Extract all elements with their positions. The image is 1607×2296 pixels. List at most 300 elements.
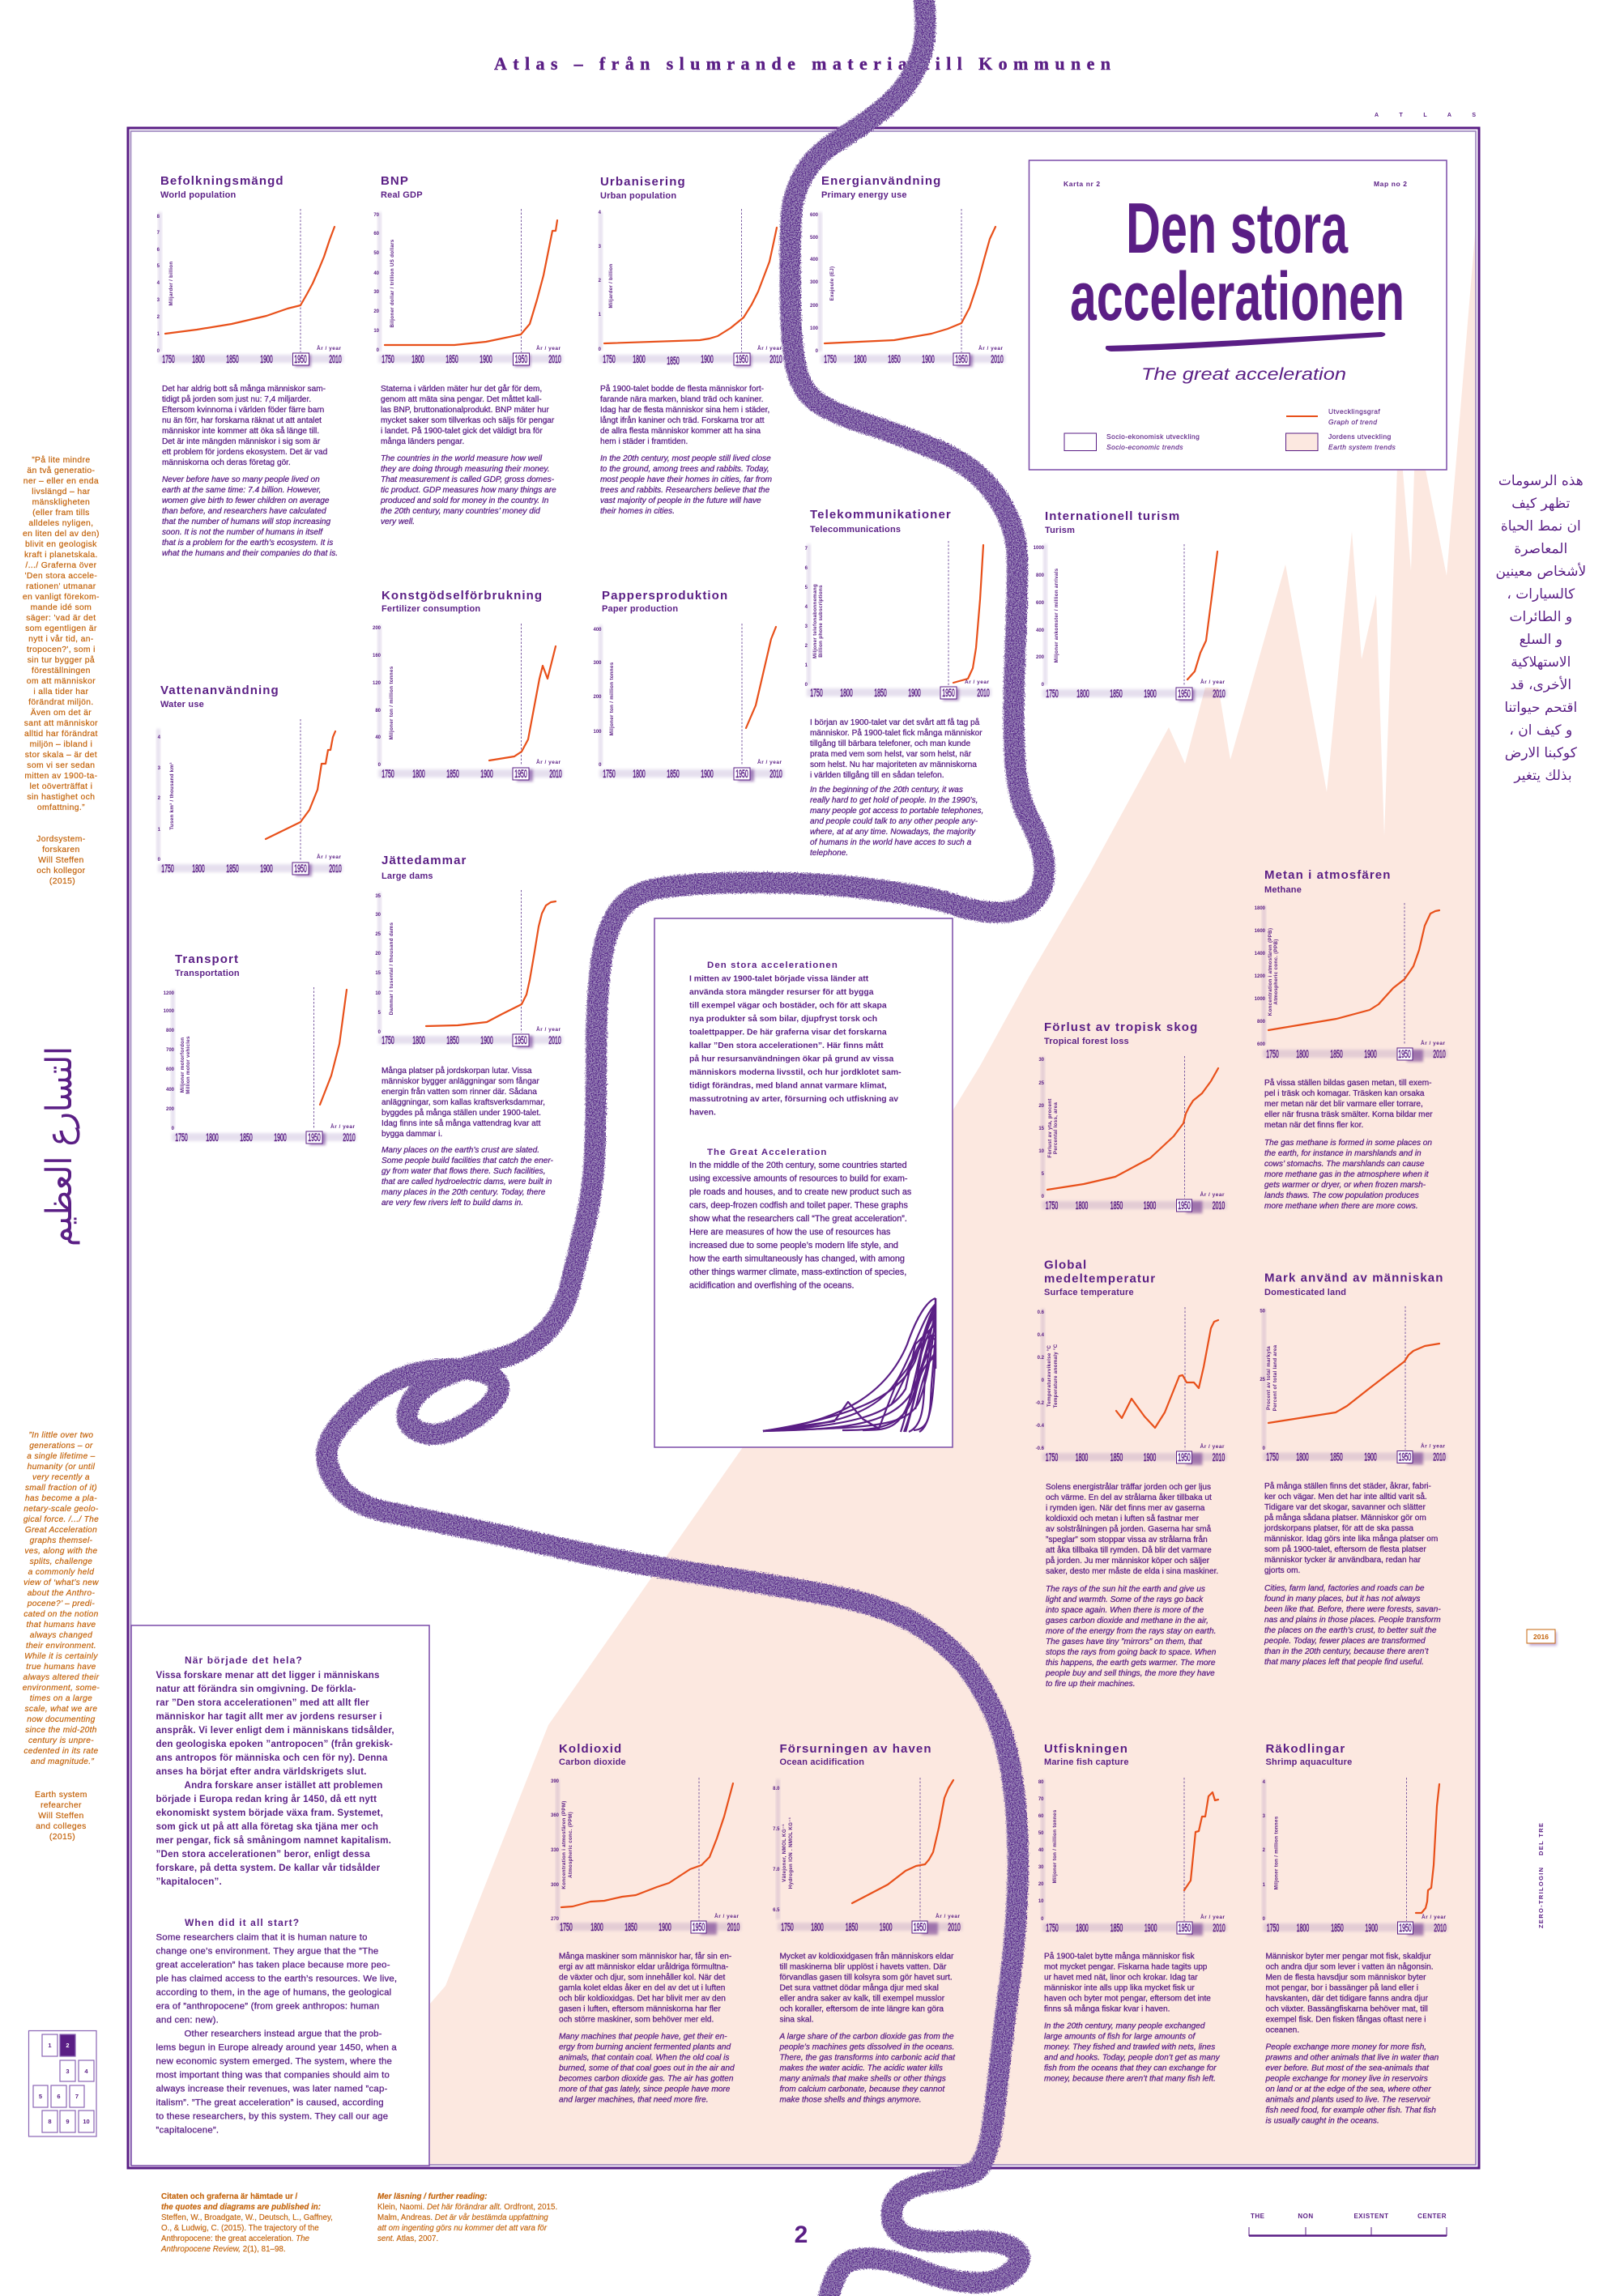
chart: Vattenanvändning: 0 bbox=[158, 858, 161, 863]
panel: När började det hela: new economic system emerged. The system, where the bbox=[156, 2057, 392, 2067]
text: Global medeltemperatur: koldioxid och metan i luften så fastnar mer bbox=[1046, 1514, 1200, 1523]
quote english: ves, along with the bbox=[24, 1547, 97, 1556]
panel: När började det hela: ”kapitalocen”. bbox=[156, 1876, 222, 1887]
chart: Vattenanvändning bbox=[156, 684, 343, 876]
quote english: their environment. bbox=[26, 1642, 96, 1651]
quote english: very recently a bbox=[32, 1473, 90, 1482]
text: Räkodlingar: ever before. But most of the sea-animals that bbox=[1265, 2064, 1430, 2073]
panel: När började det hela: människor har tagit allt mer av jordens resurser i bbox=[156, 1711, 382, 1722]
chart: Telekommunikationer: 3 bbox=[805, 624, 808, 629]
legend: Socio-economic trends bbox=[1106, 443, 1183, 451]
chart: BNP: 70 bbox=[373, 213, 380, 218]
chart: Utfiskningen: 40 bbox=[1038, 1848, 1044, 1853]
chart: Försurningen av haven: 7.0 bbox=[773, 1868, 780, 1872]
chart: Koldioxid: 1950 bbox=[693, 1922, 705, 1934]
chart: Räkodlingar: 1 bbox=[1263, 1883, 1266, 1888]
text: Räkodlingar: och andra djur som lever i vatten än någonsin. bbox=[1265, 1962, 1434, 1972]
quote english: graphs themsel- bbox=[30, 1536, 93, 1545]
quote attribution english: and colleges bbox=[36, 1822, 87, 1831]
chart: Jättedammar: Large dams bbox=[382, 871, 433, 881]
chart: Telekommunikationer: 2010 bbox=[977, 688, 990, 700]
chart: Förlust av tropisk skog: 1750 bbox=[1046, 1200, 1058, 1212]
chart: Vattenanvändning: 1950 bbox=[294, 863, 307, 875]
chart: Global medeltemperatur: Surface temperature bbox=[1044, 1288, 1134, 1297]
map navigator: 5 bbox=[39, 2093, 42, 2100]
text: Befolkningsmängd: what the humans and their companies do that is. bbox=[162, 549, 338, 558]
chart: Global medeltemperatur: 1800 bbox=[1076, 1452, 1088, 1464]
quote english: While it is certainly bbox=[24, 1652, 98, 1661]
text: Försurningen: Mycket av koldioxidgasen från människors eldar bbox=[779, 1952, 954, 1962]
chart: BNP: 1850 bbox=[445, 354, 458, 366]
chart: Vattenanvändning: Tusen km³ / thousand km³ bbox=[169, 762, 175, 830]
brush underline bbox=[1106, 332, 1385, 351]
chart: Urbanisering: 3 bbox=[599, 245, 602, 249]
text: Mark använd: people. Today, fewer places are transformed bbox=[1264, 1637, 1426, 1646]
chart: BNP: 40 bbox=[373, 271, 380, 276]
chart: Metan i atmosfären: Atmospheric conc. (PPB) bbox=[1273, 939, 1279, 1005]
chart: Energianvändning: Primary energy use bbox=[821, 190, 907, 200]
text: Försurningen: people’s machines gets dissolved in the oceans. bbox=[779, 2043, 954, 2052]
text: Mark använd: Tidigare var det skogar, savanner och slätter bbox=[1264, 1503, 1426, 1512]
chart: Befolkningsmängd: 4 bbox=[157, 281, 160, 286]
chart: Telekommunikationer: 1950 bbox=[942, 688, 955, 700]
text: BNP: Staterna i världen mäter hur det går för dem, bbox=[381, 384, 542, 394]
text: Koldioxid: animals, that contain coal. When the old coal is bbox=[559, 2054, 729, 2063]
text: Metan: mer metan när det blir varmare eller torrare, bbox=[1264, 1100, 1423, 1109]
text: Befolkningsmängd: Never before have so many people lived on bbox=[162, 475, 320, 484]
chart: Konstgödselförbrukning: Fertilizer consumption bbox=[382, 604, 480, 614]
chart: Urbanisering bbox=[599, 175, 784, 368]
map navigator bbox=[29, 2031, 96, 2136]
chart: Vattenanvändning: 1900 bbox=[260, 863, 273, 875]
panel: Den stora accelerationen: ple roads and houses, and to create new product such as bbox=[689, 1187, 912, 1197]
quote swedish: omfattning.” bbox=[37, 803, 85, 812]
text: Global medeltemperatur: The rays of the sun hit the earth and give us bbox=[1046, 1585, 1205, 1594]
chart: Försurningen av haven: Hydrogen ION . NMOL KG⁻¹ bbox=[788, 1817, 794, 1889]
chart: Energianvändning: 2010 bbox=[991, 354, 1004, 366]
quote swedish: (2015) bbox=[49, 877, 75, 886]
chart: Vattenanvändning: 2010 bbox=[329, 863, 342, 875]
text: Koldioxid: and larger machines, that need more fire. bbox=[559, 2096, 709, 2105]
text: BNP: genom att mäta sina pengar. Det måttet kall- bbox=[381, 394, 542, 404]
text: Jättedammar: gy from water that flows there. Such facilities, bbox=[382, 1167, 546, 1176]
chart: Koldioxid: Carbon dioxide bbox=[559, 1757, 626, 1767]
chart: Mark använd av människan: 1800 bbox=[1296, 1451, 1309, 1463]
chart: Befolkningsmängd: 8 bbox=[157, 215, 160, 219]
text: Koldioxid: gasen i luften, eftersom människorna har fler bbox=[559, 2005, 721, 2014]
chart: Pappersproduktion: 1750 bbox=[603, 769, 616, 781]
quote swedish: föreställningen bbox=[32, 667, 91, 675]
chart: Energianvändning: 600 bbox=[810, 213, 819, 218]
text: Jättedammar: many places in the 20th century. Today, there bbox=[382, 1188, 546, 1197]
chart: Konstgödselförbrukning: 1950 bbox=[514, 769, 527, 781]
chart: Transport: 200 bbox=[166, 1107, 175, 1112]
chart: Jättedammar: 1800 bbox=[412, 1035, 425, 1047]
quote swedish: mande idé som bbox=[31, 603, 92, 612]
quote swedish: en vanligt förekom- bbox=[23, 593, 100, 602]
chart: Internationell turism: 0 bbox=[1042, 683, 1045, 688]
chart: Jättedammar: 15 bbox=[375, 971, 382, 976]
chart: Förlust av tropisk skog bbox=[1038, 1020, 1226, 1213]
quote swedish: ”På lite mindre bbox=[32, 455, 91, 465]
chart: Energianvändning: 1950 bbox=[955, 354, 968, 366]
chart: Koldioxid: 1800 bbox=[590, 1922, 603, 1934]
quote swedish: än två generatio- bbox=[27, 466, 95, 475]
text: Global medeltemperatur: i rymden igen. När det finns mer av gaserna bbox=[1046, 1504, 1205, 1513]
text: Global medeltemperatur bbox=[1045, 1482, 1218, 1689]
panel: När började det hela: according to them, in the age of humans, the geological bbox=[156, 1988, 391, 1998]
footer further reading: Mer läsning / further reading: bbox=[377, 2192, 488, 2201]
chart: Pappersproduktion: 400 bbox=[593, 628, 602, 633]
the non existent center scale: NON bbox=[1298, 2213, 1314, 2220]
chart: Global medeltemperatur: 0 bbox=[1042, 1378, 1045, 1383]
quote english: scale, what we are bbox=[25, 1705, 97, 1714]
text: Utfiskningen: haven och byter mot pengar, eftersom det inte bbox=[1044, 1995, 1211, 2004]
text: Jättedammar: Många platser på jordskorpan lutar. Vissa bbox=[382, 1066, 532, 1076]
text: BNP bbox=[380, 384, 556, 526]
chart: Transport: 1850 bbox=[240, 1132, 253, 1144]
text: Metan: more methane gas in the atmosphere when it bbox=[1264, 1170, 1430, 1179]
text: Befolkningsmängd bbox=[162, 384, 338, 558]
chart: Vattenanvändning: 4 bbox=[158, 735, 161, 740]
panel: map title: Map no 2 bbox=[1374, 180, 1408, 188]
quote swedish: förändrat miljön. bbox=[28, 698, 94, 707]
chart: Koldioxid: År / year bbox=[714, 1912, 740, 1919]
chart: Telekommunikationer: Miljoner telefonabonnemang bbox=[812, 584, 818, 658]
text: BNP: tic product. GDP measures how many things are bbox=[381, 486, 556, 495]
text: Metan: The gas methane is formed in some places on bbox=[1264, 1139, 1432, 1148]
arabic text right column: هذه الرسومات bbox=[1498, 473, 1584, 489]
text: BNP: the 20th century, many countries’ money did bbox=[381, 507, 540, 516]
chart: Försurningen av haven: 1950 bbox=[914, 1922, 926, 1934]
chart: Mark använd av människan: 1900 bbox=[1364, 1451, 1377, 1463]
chart: Utfiskningen: 60 bbox=[1038, 1814, 1044, 1819]
chart: BNP: 10 bbox=[373, 329, 380, 334]
panel: När började det hela: forskare, på detta system. De kallar vår tidsålder bbox=[156, 1863, 381, 1873]
chart: Jättedammar: Jättedammar bbox=[382, 854, 467, 867]
legend bbox=[1064, 407, 1396, 451]
text: Urbanisering: de allra flesta människor kommer att ha sina bbox=[600, 427, 761, 436]
panel: Den stora accelerationen: nya produkter så som bilar, djupfryst torsk och bbox=[689, 1014, 877, 1024]
panel: När började det hela: most important thing was that companies should aim to bbox=[156, 2071, 390, 2081]
panel: Den stora accelerationen: increased due to some people’s modern life style, and bbox=[689, 1241, 898, 1250]
chart: Konstgödselförbrukning: 1800 bbox=[412, 769, 425, 781]
chart: Mark använd av människan: Domesticated land bbox=[1264, 1288, 1346, 1297]
chart: Befolkningsmängd: 7 bbox=[157, 231, 160, 236]
text: Försurningen: förvandlas gasen till kolsyra som gör havet surt. bbox=[779, 1974, 953, 1983]
panel: När började det hela: som gick ut på att alla företag ska tjäna mer och bbox=[156, 1821, 378, 1832]
quote swedish: let oöverträffat i bbox=[30, 782, 92, 791]
legend: Jordens utveckling bbox=[1328, 432, 1392, 441]
chart: BNP: 0 bbox=[377, 348, 380, 353]
text: Global medeltemperatur: och värme. En del av strålarna åker tillbaka ut bbox=[1046, 1493, 1212, 1502]
quote english: a single lifetime – bbox=[27, 1452, 96, 1461]
chart: Koldioxid: 300 bbox=[551, 1883, 560, 1888]
text: Metan: lands thaws. The cow population produces bbox=[1264, 1191, 1419, 1200]
chart: Konstgödselförbrukning: 200 bbox=[373, 626, 382, 631]
text: Utfiskningen: and and hooks. Today, people don’t get as many bbox=[1044, 2054, 1221, 2063]
chart: Mark använd av människan: Mark använd av människan bbox=[1264, 1272, 1443, 1285]
chart: Koldioxid: 270 bbox=[551, 1917, 560, 1922]
the non existent center scale: CENTER bbox=[1417, 2213, 1447, 2220]
chart: Försurningen av haven bbox=[773, 1742, 962, 1935]
footer further reading: Klein, Naomi. Det här förändrar allt. Ordfront, 2015. bbox=[377, 2203, 557, 2212]
chart: Internationell turism: Internationell turism bbox=[1045, 509, 1180, 523]
chart: Jättedammar: 10 bbox=[375, 991, 382, 996]
chart: Utfiskningen: 50 bbox=[1038, 1831, 1044, 1836]
chart: Energianvändning bbox=[810, 174, 1005, 367]
chart: Energianvändning: 0 bbox=[816, 349, 819, 354]
text: Jättedammar: människor bygger anläggningar som fångar bbox=[382, 1076, 539, 1086]
text: Utfiskningen: finns så många fiskar kvar i haven. bbox=[1044, 2004, 1170, 2014]
text: Jättedammar: are very few rivers left to build dams in. bbox=[382, 1199, 523, 1208]
chart: Metan i atmosfären: År / year bbox=[1421, 1039, 1446, 1046]
chart: Urbanisering: 2010 bbox=[769, 354, 782, 366]
panel: När började det hela: började i Europa redan kring år 1450, då ett nytt bbox=[156, 1794, 377, 1804]
text: Räkodlingar: people exchange for money live in reservoirs bbox=[1265, 2075, 1428, 2084]
chart: Koldioxid: 330 bbox=[551, 1848, 560, 1853]
chart: Utfiskningen bbox=[1038, 1742, 1227, 1936]
text: Global medeltemperatur: more of the energy from the rays stay on earth. bbox=[1046, 1627, 1216, 1636]
quote swedish: tropocen?', som i bbox=[27, 645, 96, 654]
text: Urbanisering: most people have their homes in cities, far from bbox=[600, 475, 772, 484]
arabic text right column: المعاصرة bbox=[1514, 541, 1567, 557]
chart: Försurningen av haven: 7.5 bbox=[773, 1827, 780, 1832]
chart: Jättedammar: 35 bbox=[375, 894, 382, 899]
chart: Urbanisering: 1950 bbox=[735, 354, 748, 366]
chart: Förlust av tropisk skog: 1800 bbox=[1076, 1200, 1088, 1212]
text: Försurningen: sina skal. bbox=[779, 2016, 814, 2025]
chart: Urbanisering: 1800 bbox=[633, 354, 646, 366]
panel: När började det hela: ple has claimed access to the earth’s resources. We live, bbox=[156, 1974, 397, 1984]
chart: Telekommunikationer: År / year bbox=[965, 678, 990, 685]
text: Räkodlingar: och växter. Bassängfiskarna behöver mat, till bbox=[1265, 2005, 1428, 2014]
chart: Urbanisering: 1850 bbox=[667, 356, 680, 368]
chart: Mark använd av människan: Percent of total land area bbox=[1272, 1344, 1278, 1411]
quote english: always changed bbox=[30, 1631, 92, 1640]
chart: Metan i atmosfären: 1400 bbox=[1255, 952, 1266, 956]
text: Mark använd: found in many places, but it has not always bbox=[1264, 1595, 1420, 1604]
chart: Konstgödselförbrukning bbox=[373, 589, 563, 782]
quote english: humanity (or until bbox=[28, 1463, 96, 1472]
text: Räkodlingar: oceanen. bbox=[1265, 2026, 1299, 2035]
chart: Försurningen av haven: Försurningen av haven bbox=[779, 1742, 932, 1756]
text: Metan: more methane when there are more cows. bbox=[1264, 1202, 1418, 1211]
text: Utfiskningen: money. They fished and trawled with nets, lines bbox=[1044, 2043, 1215, 2052]
chart: Telekommunikationer: Telecommunications bbox=[810, 525, 901, 535]
text: Mark använd: the places on the earth’s crust, to better suit the bbox=[1264, 1626, 1437, 1635]
chart: Mark använd av människan: 1750 bbox=[1266, 1451, 1279, 1463]
quote english: that humans have bbox=[27, 1621, 96, 1629]
text: Mark använd: ker och vägar. Men det har inte alltid varit så. bbox=[1264, 1492, 1427, 1502]
chart: Jättedammar: 1850 bbox=[446, 1035, 459, 1047]
text: Räkodlingar: prawns and other animals that live in water than bbox=[1265, 2054, 1439, 2063]
text: Räkodlingar: is usually caught in the oceans. bbox=[1265, 2117, 1379, 2126]
chart: Pappersproduktion: Pappersproduktion bbox=[602, 589, 728, 603]
page frame bbox=[128, 128, 1479, 2168]
chart: Pappersproduktion: 300 bbox=[593, 661, 602, 666]
chart: Förlust av tropisk skog: 1850 bbox=[1110, 1200, 1123, 1212]
chart: Koldioxid: 2010 bbox=[727, 1922, 740, 1934]
chart: Metan i atmosfären: Metan i atmosfären bbox=[1264, 868, 1392, 882]
chart: Räkodlingar bbox=[1262, 1742, 1448, 1936]
text: Räkodlingar: on land or at the edge of the sea, where other bbox=[1265, 2085, 1431, 2094]
text: Försurningen: och koraller, eftersom de inte längre kan göra bbox=[779, 2005, 944, 2014]
quote english: cated on the notion bbox=[23, 1610, 99, 1619]
text: Global medeltemperatur: to fire up their machines. bbox=[1046, 1680, 1136, 1689]
text: Utfiskningen: money, because there aren’t that many fish left. bbox=[1044, 2075, 1216, 2084]
chart: Jättedammar: 30 bbox=[375, 913, 382, 918]
text: Jättedammar: Idag finns inte så många vattendrag kvar att bbox=[382, 1118, 541, 1128]
chart: Pappersproduktion: 1850 bbox=[667, 769, 680, 781]
text: Utfiskningen: mot mycket pengar. Fiskarna hade tagits upp bbox=[1044, 1963, 1208, 1972]
chart: Vattenanvändning: Vattenanvändning bbox=[160, 684, 279, 697]
text: Urbanisering: Idag har de flesta människor sina hem i städer, bbox=[600, 406, 769, 415]
chart: Utfiskningen: 70 bbox=[1038, 1797, 1044, 1802]
footer sources: O., & Ludwig, C. (2015). The trajectory of the bbox=[161, 2224, 319, 2233]
quote swedish: mitten av 1900-ta- bbox=[24, 772, 97, 781]
quote attribution english: Earth system bbox=[35, 1791, 87, 1800]
chart: Transport: Miljoner motorfordon bbox=[180, 1037, 185, 1093]
map navigator: 1 bbox=[48, 2042, 52, 2049]
chart: Försurningen av haven: 6.5 bbox=[773, 1908, 780, 1913]
quote swedish: miljön – ibland i bbox=[30, 740, 92, 749]
text: Koldioxid: more of that gas lately, since people have more bbox=[559, 2085, 731, 2094]
chart: Räkodlingar: 2 bbox=[1263, 1848, 1266, 1853]
chart: Koldioxid: Atmospheric conc. (PPM) bbox=[568, 1812, 573, 1878]
pink earth system mountain background bbox=[430, 225, 1476, 2165]
chart: Global medeltemperatur: 1900 bbox=[1144, 1452, 1156, 1464]
text: Metan: eller när frusna träsk smälter. Korna bildar mer bbox=[1264, 1110, 1433, 1119]
chart: Vattenanvändning: 1 bbox=[158, 828, 161, 833]
panel: När började det hela: ”capitalocene”. bbox=[156, 2126, 219, 2136]
chart: Förlust av tropisk skog: 20 bbox=[1038, 1104, 1045, 1109]
text: Räkodlingar: mot pengar, bor i bassänger på land eller i bbox=[1265, 1983, 1418, 1993]
chart: Urbanisering: 0 bbox=[599, 347, 602, 352]
text: Telekommunikationer: really hard to get hold of people. In the 1990’s, bbox=[810, 796, 978, 805]
text: Mark använd: that many places left that people find useful. bbox=[1264, 1658, 1424, 1667]
chart: Telekommunikationer: Telekommunikationer bbox=[810, 508, 952, 522]
chart: Transport: 700 bbox=[166, 1048, 175, 1053]
text: BNP: That measurement is called GDP, gross domes- bbox=[381, 475, 555, 484]
text: Telekommunikationer: In the beginning of the 20th century, it was bbox=[810, 786, 963, 794]
quote swedish: alltid har förändrat bbox=[24, 730, 98, 739]
text: Räkodlingar: exempel fisk. Den fisken fångas oftast nere i bbox=[1265, 2015, 1426, 2025]
year tag 2016: 2016 bbox=[1533, 1633, 1549, 1641]
quote english: a commonly held bbox=[28, 1568, 94, 1577]
chart: Energianvändning: 300 bbox=[810, 280, 819, 285]
chart: Urbanisering: 4 bbox=[599, 211, 602, 215]
chart: Energianvändning: Energianvändning bbox=[821, 174, 941, 188]
chart: Förlust av tropisk skog: År / year bbox=[1200, 1191, 1225, 1198]
text: Befolkningsmängd: Det har aldrig bott så många människor sam- bbox=[162, 384, 326, 394]
chart: Befolkningsmängd: 1 bbox=[157, 332, 160, 337]
text: Försurningen: There, the gas transforms into carbonic acid that bbox=[779, 2054, 956, 2063]
chart: Jättedammar: 2010 bbox=[548, 1035, 561, 1047]
chart: Koldioxid: 1850 bbox=[624, 1922, 637, 1934]
quote english: and magnitude.” bbox=[31, 1757, 94, 1766]
quote swedish: säger: 'vad är det bbox=[26, 614, 96, 623]
quote swedish: som egentligen är bbox=[25, 624, 97, 633]
chart: Mark använd av människan: Procent av total markyta bbox=[1266, 1346, 1272, 1410]
chart: Pappersproduktion: Miljoner ton / million tonnes bbox=[609, 662, 615, 735]
chart: Internationell turism: 200 bbox=[1036, 655, 1045, 660]
text: Urbanisering: to the ground, among trees and rabbits. Today, bbox=[600, 465, 769, 474]
panel: Den stora accelerationen: haven. bbox=[689, 1108, 716, 1118]
chart: Förlust av tropisk skog: 25 bbox=[1038, 1081, 1045, 1086]
quote swedish: och kollegor bbox=[36, 867, 86, 875]
chart: Förlust av tropisk skog: Förlust av tropisk skog bbox=[1044, 1020, 1198, 1034]
text: Befolkningsmängd: Eftersom kvinnorna i världen föder färre barn bbox=[162, 406, 324, 415]
chart: Telekommunikationer: 6 bbox=[805, 566, 808, 571]
chart: Global medeltemperatur: medeltemperatur bbox=[1044, 1272, 1156, 1286]
chart: Befolkningsmängd: Befolkningsmängd bbox=[160, 174, 284, 188]
text: Utfiskningen bbox=[1044, 1952, 1221, 2084]
panel: map title: The great acceleration bbox=[1141, 365, 1346, 384]
text: Utfiskningen: In the 20th century, many people exchanged bbox=[1044, 2022, 1205, 2031]
text: Metan: cows’ stomachs. The marshlands can cause bbox=[1264, 1160, 1425, 1169]
chart: Transport bbox=[164, 952, 356, 1145]
page number: 2 bbox=[795, 2221, 808, 2248]
chart: Urbanisering: Urban population bbox=[600, 191, 676, 201]
chart: Internationell turism: 1000 bbox=[1034, 546, 1045, 551]
text: Försurningen: A large share of the carbon dioxide gas from the bbox=[779, 2033, 954, 2042]
quote english: Great Acceleration bbox=[25, 1526, 97, 1535]
panel: När började det hela: Vissa forskare menar att det ligger i människans bbox=[156, 1670, 380, 1680]
chart: Pappersproduktion: År / year bbox=[757, 758, 782, 765]
chart: Urbanisering: 2 bbox=[599, 279, 602, 283]
panel: map title bbox=[1029, 160, 1447, 470]
chart: Jättedammar: 1750 bbox=[382, 1035, 394, 1047]
quote swedish: mänskligheten bbox=[32, 498, 90, 507]
panel: Den stora accelerationen: på hur resursanvändningen ökar på grund av vissa bbox=[689, 1054, 894, 1064]
chart: Metan i atmosfären: 1000 bbox=[1255, 997, 1266, 1002]
chart: Konstgödselförbrukning: 80 bbox=[375, 709, 382, 714]
text: Global medeltemperatur: light and warmth. Some of the rays go back bbox=[1046, 1595, 1204, 1604]
chart: Internationell turism: Turism bbox=[1045, 526, 1075, 535]
text: Metan: pel i träsk och komagar. Träsken kan orsaka bbox=[1264, 1089, 1425, 1098]
chart: Telekommunikationer: 1900 bbox=[908, 688, 921, 700]
text: Utfiskningen: människor inte alls upp lika mycket fisk ur bbox=[1044, 1984, 1195, 1993]
chart: Räkodlingar: 1900 bbox=[1365, 1923, 1378, 1935]
text: Mark använd: på många sådana platser. Människor gör om bbox=[1264, 1513, 1426, 1523]
text: Jättedammar: Some people build facilities that catch the ener- bbox=[382, 1157, 554, 1165]
panel: Den stora accelerationen: cars, deep-frozen codfish and toilet paper. These graphs bbox=[689, 1200, 908, 1210]
quote swedish: om att människor bbox=[27, 677, 96, 686]
panel: När började det hela: mer pengar, fick så småningom namnet kapitalism. bbox=[156, 1835, 391, 1846]
chart: Metan i atmosfären bbox=[1255, 868, 1447, 1062]
chart: BNP: 1900 bbox=[480, 354, 492, 366]
panel: Den stora accelerationen: In the middle of the 20th century, some countries started bbox=[689, 1161, 907, 1170]
chart: Energianvändning: 1750 bbox=[824, 354, 837, 366]
text: Befolkningsmängd: that is a problem for the earth’s ecosystem. It is bbox=[162, 539, 333, 547]
chart: Vattenanvändning: 1850 bbox=[226, 863, 239, 875]
panel: Den stora accelerationen: other things warmer climate, mass-extinction of species, bbox=[689, 1267, 906, 1277]
text: Befolkningsmängd: Det är inte mängden människor i sig som är bbox=[162, 437, 321, 446]
text: Telekommunikationer: människor. På 1900-talet fick många människor bbox=[810, 728, 983, 738]
text: Global medeltemperatur: på jorden. Ju mer människor köper och säljer bbox=[1046, 1556, 1210, 1565]
chart: Pappersproduktion bbox=[593, 589, 784, 782]
panel: När började det hela: Other researchers instead argue that the prob- bbox=[185, 2030, 382, 2039]
quote swedish: rationen' utmanar bbox=[26, 582, 96, 591]
chart: Transport: 1800 bbox=[206, 1132, 219, 1144]
chart: Vattenanvändning: Water use bbox=[160, 700, 204, 709]
chart: Koldioxid: 360 bbox=[551, 1813, 560, 1818]
chart: Konstgödselförbrukning: År / year bbox=[536, 758, 561, 765]
text: Räkodlingar: fish need food, for example other fish. That fish bbox=[1265, 2106, 1436, 2115]
main title: Atlas – från slumrande materia till Kommunen bbox=[494, 53, 1110, 74]
the non existent center scale bbox=[1249, 2213, 1447, 2235]
